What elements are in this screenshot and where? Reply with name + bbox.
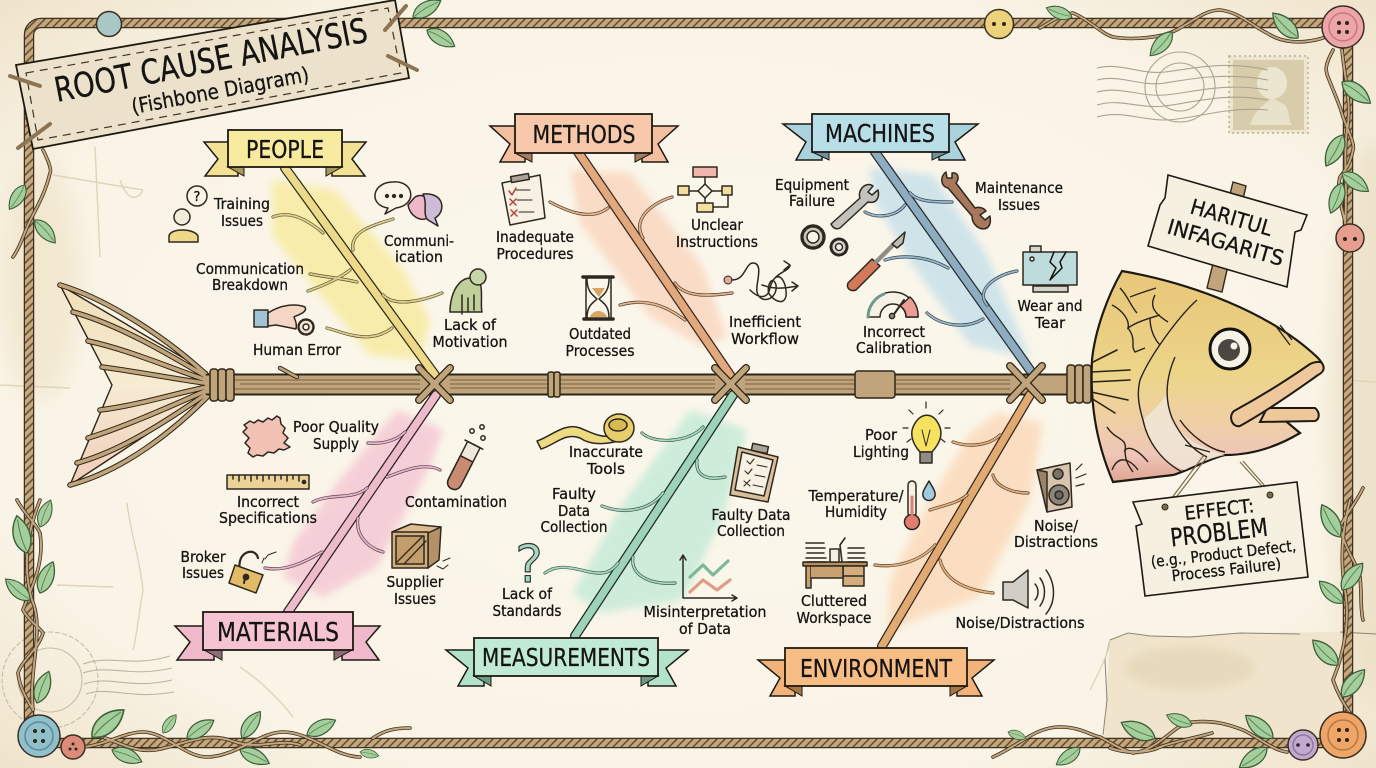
title sign: (Fishbone Diagram) [130,63,311,119]
text labels: methods: Processes [566,342,634,360]
bone: materials [265,395,440,612]
icon: checklist clipboard [502,173,545,225]
banner: machines: MACHINES [825,119,935,148]
text labels: environment: Noise/Distractions [956,614,1084,632]
text labels: people: Motivation [432,333,508,351]
text labels: measurements: Tools [586,460,625,478]
text labels: environment: Noise/ [1034,517,1079,535]
text labels: materials [180,418,507,608]
text labels: machines: Failure [789,192,835,210]
icon: padlock [229,552,276,593]
text labels: measurements: Collection [717,522,785,540]
icon: cracked machine [1023,246,1077,292]
banner: machines [783,114,978,160]
text labels: measurements: Inaccurate [569,443,643,461]
text labels: people: ication [395,248,443,266]
icon: hand and gear [254,305,314,334]
effect sign: Process Failure) [1171,555,1282,585]
text labels: people: Issues [221,212,263,230]
text labels: methods: Unclear [691,216,744,234]
text labels: measurements: Misinterpretation [644,603,766,621]
text labels: measurements: Collection [540,518,608,536]
sign post and top sign: INFAGARITS [1165,215,1287,271]
text labels: measurements: Data [558,502,590,520]
text labels: environment: Cluttered [801,592,867,610]
text labels: measurements: Faulty Data [712,506,790,524]
banner: materials: MATERIALS [217,618,339,648]
text labels: methods [496,216,801,360]
text labels: people: Human Error [253,341,342,359]
banner: measurements [446,638,688,686]
text labels: machines: Maintenance [975,179,1063,197]
text labels: materials: Issues [394,590,436,608]
sign post and top sign [1148,175,1307,292]
icon: hourglass [583,277,613,319]
text labels: machines: Wear and [1018,297,1082,315]
icon: speech bubbles [375,182,442,226]
text labels: materials: Specifications [219,509,317,527]
spine knots [419,366,1042,400]
icon: wrench and gears [802,185,879,255]
text labels: measurements: Lack of [502,585,552,603]
text labels: environment: Poor [865,426,898,444]
icon: tired person [450,269,486,314]
icon: tape measure [537,414,634,449]
text labels: measurements: of Data [679,620,731,638]
icon: loudspeaker [1003,570,1054,614]
text labels: methods: Outdated [569,325,631,343]
banner: environment: ENVIRONMENT [800,654,953,683]
text labels: machines: Calibration [856,339,932,357]
banner: methods [490,114,678,162]
text labels: machines: Tear [1034,314,1066,332]
fish tail [60,285,212,485]
text labels: methods: Instructions [676,233,758,251]
icon: test tube [443,425,485,493]
text labels: environment: Temperature/ [808,487,904,505]
text labels: measurements: Standards [492,602,562,620]
text labels: environment: Distractions [1014,533,1098,551]
text labels: environment: Lighting [853,443,909,461]
icon: person with question: ? [194,190,200,205]
sign post and top sign: HARITUL [1188,195,1275,241]
text labels: people: Training [213,195,270,213]
text labels: methods: Procedures [496,245,574,263]
icon: person with question [169,186,207,242]
fish head [1091,271,1324,482]
icon: question mark: ? [515,535,543,595]
icon: tangled workflow [724,261,798,302]
icon: speaker box [1037,463,1086,512]
banner: methods: METHODS [532,120,636,149]
bone: methods [550,152,732,375]
text labels: methods: Inadequate [496,228,574,246]
watercolor washes [272,168,1043,633]
icon: wooden crate [392,524,450,569]
text labels: people: Breakdown [212,276,288,294]
text labels: people [196,195,508,359]
text labels: methods: Inefficient [729,313,801,331]
bone: machines [865,152,1030,370]
icon: screwdriver [847,232,905,291]
text labels: methods: Workflow [731,330,799,348]
text labels: environment: Humidity [825,503,887,521]
effect sign: EFFECT: [1183,495,1255,525]
banner: measurements: MEASUREMENTS [482,643,650,672]
banner: people: PEOPLE [246,135,324,164]
text labels: materials: Supplier [386,573,444,591]
banner: people [204,130,366,176]
text labels: materials: Incorrect [237,493,299,511]
icon: flowchart [678,167,732,212]
title sign [10,0,417,149]
icon: ruler [227,475,309,489]
text labels: people: Communi- [384,232,454,250]
bone: people [273,168,442,375]
icon: fabric patch [243,416,290,457]
text labels: materials: Issues [182,564,224,582]
effect sign: (e.g., Product Defect, [1150,537,1297,571]
bone: measurements [545,395,733,636]
text labels: materials: Poor Quality [293,418,379,436]
effect sign: PROBLEM [1169,513,1269,553]
icon: rising chart [680,555,737,601]
text labels: people: Communication [196,260,304,278]
text labels: machines: Incorrect [863,323,925,341]
bone: environment [875,395,1030,646]
text labels: people: Lack of [444,316,497,334]
text labels: materials: Supply [313,435,359,453]
icon: gauge [868,292,918,319]
banner: environment [758,648,994,696]
text labels: environment: Workspace [796,609,872,627]
icon: cluttered desk [803,538,867,588]
text labels: measurements: Faulty [552,485,596,503]
text labels: environment [796,426,1098,632]
effect sign [1133,455,1308,596]
text labels: machines: Equipment [775,176,849,194]
text labels: materials: Broker [180,548,226,566]
banner: materials [175,612,380,660]
text labels: machines [775,176,1082,357]
icon: thermometer and drop [904,481,935,530]
text labels: measurements [492,443,790,638]
icon: light bulb [903,402,950,463]
text labels: materials: Contamination [405,493,507,511]
spine [205,365,1095,403]
icon: clipboard with checks [730,443,778,502]
icon: wrench [942,172,990,229]
text labels: machines: Issues [998,196,1040,214]
